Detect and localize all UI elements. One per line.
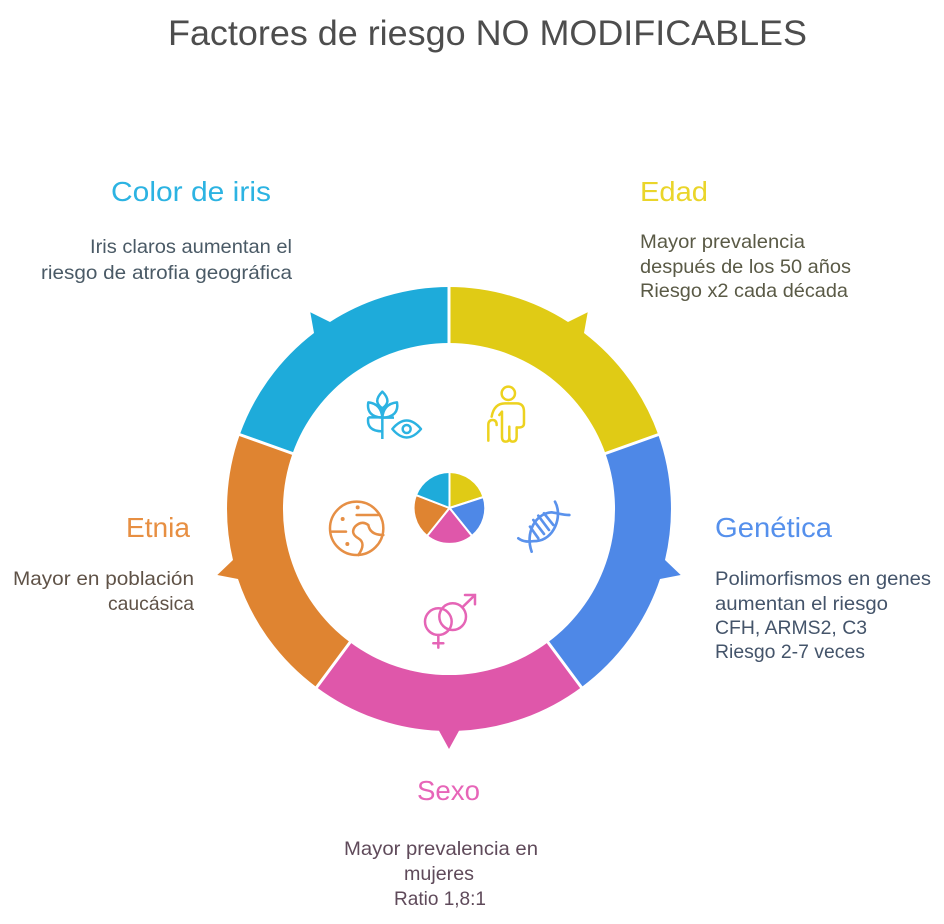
segment: Genética — [548, 435, 681, 687]
text block: Genética: aumentan el riesgo — [715, 593, 888, 615]
segment: Etnia — [217, 435, 350, 687]
text block: Etnia: Mayor en población — [13, 568, 194, 590]
text block: Sexo: Mayor prevalencia en — [344, 838, 538, 860]
text block: Color de iris — [41, 176, 292, 284]
text block: Genética — [715, 512, 931, 663]
center pie chart — [414, 472, 485, 544]
pie slice: Etnia — [414, 495, 450, 536]
segment: Edad — [449, 287, 658, 454]
pie slice: Color de iris — [416, 472, 450, 508]
pie slice: Edad — [450, 472, 484, 508]
segment: Color de iris — [240, 287, 449, 454]
text block: Edad: después de los 50 años — [640, 256, 851, 278]
title: Factores de riesgo NO MODIFICABLES — [168, 14, 807, 53]
text block: Sexo: mujeres — [404, 863, 474, 885]
icon: globe — [330, 502, 383, 555]
icon: elderly person with cane — [488, 387, 524, 442]
text block: Etnia: caucásica — [108, 593, 194, 615]
heading: Genética: Genética — [715, 512, 832, 543]
icon: wheat and eye — [368, 392, 421, 439]
text block: Etnia — [13, 512, 194, 615]
text block: Sexo: Ratio 1,8:1 — [394, 888, 486, 910]
text block: Genética: Riesgo 2-7 veces — [715, 641, 865, 663]
text block: Sexo — [344, 775, 538, 910]
segment: Sexo — [317, 642, 581, 749]
icon: DNA helix — [518, 502, 569, 552]
pie slice: Sexo — [427, 508, 472, 544]
text block: Edad — [640, 176, 851, 302]
donut ring — [217, 284, 681, 749]
heading: Etnia: Etnia — [126, 512, 190, 543]
pie slice: Genética — [450, 497, 485, 536]
text block: Genética: CFH, ARMS2, C3 — [715, 617, 867, 639]
text block: Genética: Polimorfismos en genes — [715, 568, 931, 590]
text block: Color de iris: riesgo de atrofia geográfica — [41, 262, 292, 284]
heading: Color de iris: Color de iris — [111, 176, 271, 207]
heading: Sexo: Sexo — [417, 775, 480, 806]
icon: gender symbols — [425, 595, 475, 648]
text block: Edad: Mayor prevalencia — [640, 231, 805, 253]
heading: Edad: Edad — [640, 176, 708, 207]
text block: Edad: Riesgo x2 cada década — [640, 280, 848, 302]
text block: Color de iris: Iris claros aumentan el — [90, 236, 292, 258]
